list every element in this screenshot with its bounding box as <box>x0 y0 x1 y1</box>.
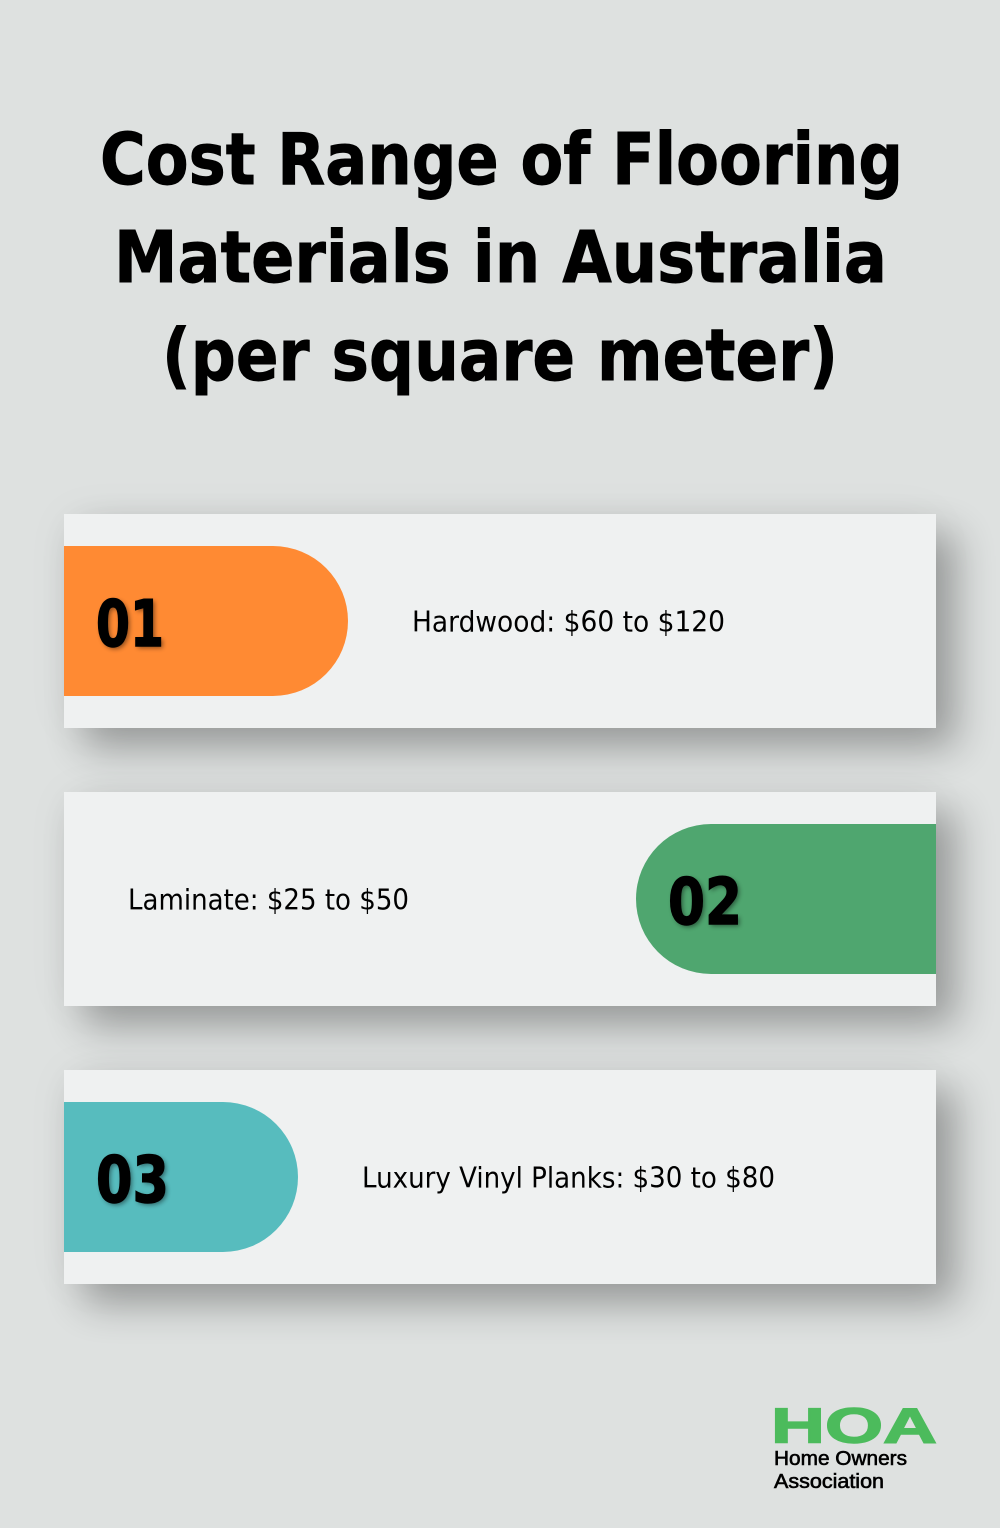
logo: HOA Home Owners Association: HOA <box>771 1400 937 1454</box>
panel: laminate <box>64 792 956 1026</box>
logo: HOA Home Owners Association <box>771 1400 937 1493</box>
number tab: 03: 03 <box>98 1146 171 1220</box>
label: laminate cost: Laminate: $25 to $50 <box>128 884 409 916</box>
label: hardwood cost: Hardwood: $60 to $120 <box>412 606 725 638</box>
title: (per square meter) <box>162 314 838 397</box>
panel: luxury vinyl planks <box>64 1070 956 1304</box>
panel: hardwood <box>64 514 956 748</box>
logo: HOA Home Owners Association: Home Owners <box>774 1448 907 1470</box>
number tab: 02 <box>636 824 936 974</box>
title: Materials in Australia <box>114 216 887 299</box>
number tab: 01 <box>64 546 348 696</box>
number tab: 01: 01 <box>96 588 164 662</box>
number tab: 02: 02 <box>670 868 744 942</box>
number tab: 02: 02 <box>668 866 742 940</box>
label: luxury vinyl planks cost: Luxury Vinyl Planks: $30 to $80 <box>362 1162 775 1194</box>
number tab: 03 <box>64 1102 298 1252</box>
number tab: 01: 01 <box>98 590 166 664</box>
logo: HOA Home Owners Association: Association <box>774 1471 884 1493</box>
number tab: 03: 03 <box>96 1144 169 1218</box>
title: Cost Range of Flooring <box>100 118 903 201</box>
title <box>100 118 903 397</box>
